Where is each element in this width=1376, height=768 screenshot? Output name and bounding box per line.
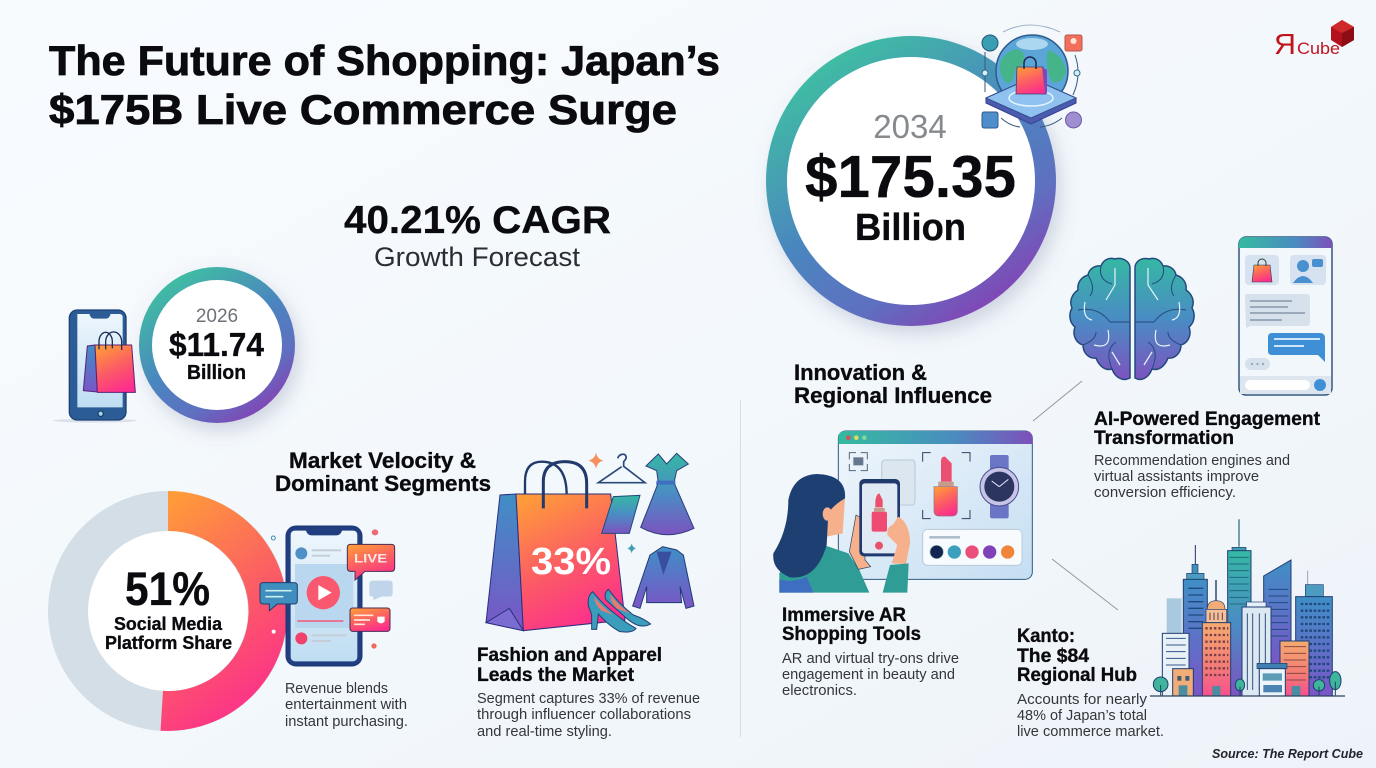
ring: 2026 market value: $11.74 bbox=[169, 326, 265, 363]
text: Kanto regional hub: The $84 bbox=[1017, 646, 1089, 667]
heading: innovation and regional influence: Regional Influence bbox=[794, 383, 992, 408]
text: revenue blends bbox=[285, 681, 408, 730]
ring: 2026 market value bbox=[139, 267, 295, 423]
heading: market velocity and dominant segments: Dominant Segments bbox=[275, 471, 491, 496]
text: AI-powered engagement: virtual assistants improve bbox=[1094, 469, 1259, 485]
text: revenue blends: Revenue blends bbox=[285, 681, 388, 697]
icon: fashion shopping bag with 33% bbox=[486, 453, 694, 632]
icon: AI brain bbox=[1070, 258, 1194, 379]
text: AI-powered engagement bbox=[1094, 409, 1321, 501]
text: revenue blends: instant purchasing. bbox=[285, 714, 408, 730]
ring: 2026 market value: 2026 bbox=[196, 306, 238, 327]
donut chart: 51% social media platform share: 51% bbox=[125, 562, 210, 615]
title: $175B Live Commerce Surge bbox=[49, 86, 677, 133]
donut chart: 51% social media platform share: Platform Share bbox=[105, 633, 232, 653]
CAGR growth forecast bbox=[344, 199, 611, 272]
title: The Future of Shopping: Japan’s bbox=[49, 37, 720, 84]
icon: globe with shopping bag on platform bbox=[982, 25, 1082, 128]
CAGR growth forecast: 40.21% CAGR bbox=[344, 199, 611, 242]
text: fashion and apparel: Segment captures 33% of revenue bbox=[477, 691, 700, 707]
ring: 2034 market value: 2034 bbox=[873, 108, 947, 145]
CAGR growth forecast: Growth Forecast bbox=[374, 242, 581, 272]
source note: Source: The Report Cube bbox=[1212, 747, 1363, 761]
title bbox=[49, 37, 720, 133]
heading: market velocity and dominant segments: Market Velocity & bbox=[289, 448, 476, 473]
text: fashion and apparel bbox=[477, 645, 700, 740]
text: fashion and apparel: and real-time styling. bbox=[477, 724, 612, 740]
text: fashion and apparel: Fashion and Apparel bbox=[477, 645, 662, 666]
text: immersive AR shopping tools: Shopping Tools bbox=[782, 624, 921, 645]
text: immersive AR shopping tools: Immersive AR bbox=[782, 605, 906, 626]
text: immersive AR shopping tools: AR and virtual try-ons drive bbox=[782, 651, 959, 667]
ring: 2034 market value: $175.35 bbox=[805, 144, 1016, 210]
donut chart: 51% social media platform share: Social Media bbox=[114, 614, 223, 634]
text: immersive AR shopping tools bbox=[782, 605, 959, 699]
heading: innovation and regional influence bbox=[794, 360, 992, 408]
ring: 2034 market value bbox=[766, 36, 1056, 326]
icon: phone with live stream bbox=[260, 526, 395, 666]
logo: RCube bbox=[1274, 20, 1354, 61]
text: Kanto regional hub: live commerce market. bbox=[1017, 724, 1164, 740]
icon: phone with live stream: LIVE bbox=[354, 552, 387, 566]
text: fashion and apparel: Leads the Market bbox=[477, 665, 635, 686]
text: Kanto regional hub: 48% of Japan’s total bbox=[1017, 708, 1147, 724]
text: immersive AR shopping tools: electronics. bbox=[782, 683, 857, 699]
text: AI-powered engagement: Recommendation engines and bbox=[1094, 453, 1290, 469]
icon: phone with shopping bag bbox=[53, 310, 137, 423]
text: Kanto regional hub bbox=[1017, 626, 1164, 740]
icon: fashion shopping bag with 33%: 33% bbox=[531, 540, 611, 582]
heading: innovation and regional influence: Innovation & bbox=[794, 360, 927, 385]
icon: chat assistant phone bbox=[1239, 237, 1332, 395]
text: Kanto regional hub: Regional Hub bbox=[1017, 665, 1137, 686]
logo: RCube: Cube bbox=[1297, 39, 1340, 58]
text: Kanto regional hub: Kanto: bbox=[1017, 626, 1075, 647]
text: AI-powered engagement: Transformation bbox=[1094, 428, 1234, 449]
ring: 2026 market value: Billion bbox=[187, 362, 246, 384]
text: AI-powered engagement: AI-Powered Engagement bbox=[1094, 409, 1321, 430]
donut chart: 51% social media platform share bbox=[48, 491, 288, 731]
logo: RCube: Я bbox=[1274, 29, 1296, 61]
icon: city skyline bbox=[1150, 519, 1345, 696]
text: fashion and apparel: through influencer collaborations bbox=[477, 707, 691, 723]
text: Kanto regional hub: Accounts for nearly bbox=[1017, 692, 1148, 708]
ring: 2034 market value: Billion bbox=[855, 207, 966, 249]
heading: market velocity and dominant segments bbox=[275, 448, 491, 496]
text: revenue blends: entertainment with bbox=[285, 697, 407, 713]
icon: AR try-on shopper bbox=[773, 431, 1032, 593]
text: AI-powered engagement: conversion efficiency. bbox=[1094, 485, 1236, 501]
text: immersive AR shopping tools: engagement in beauty and bbox=[782, 667, 955, 683]
